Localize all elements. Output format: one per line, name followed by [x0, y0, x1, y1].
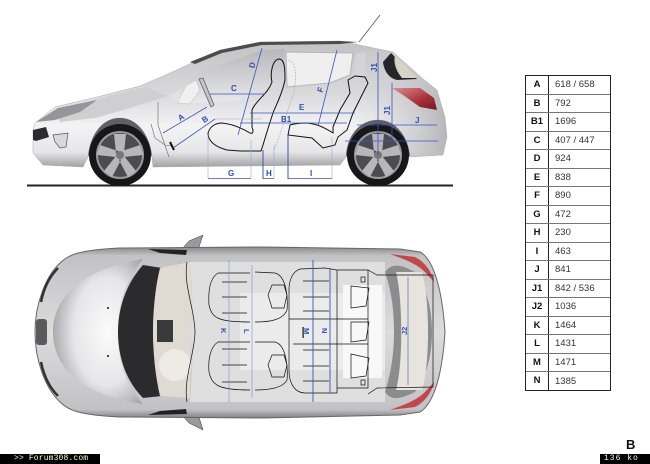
- nose dark trim: [41, 268, 58, 396]
- dimensions table: F: [534, 190, 540, 201]
- dimensions table: 841: [555, 264, 571, 275]
- dimensions table: 890: [555, 190, 571, 201]
- top dimension lines: [229, 260, 408, 402]
- front spokes: [97, 134, 143, 177]
- fog lamp: [53, 133, 68, 148]
- dashboard: [153, 262, 192, 398]
- dimensions table: 1036: [555, 301, 576, 312]
- M mark: [302, 327, 304, 338]
- top dimension labels: J2: [400, 327, 409, 335]
- a-pillar handle: [199, 78, 214, 107]
- top dimension labels: L: [242, 329, 251, 334]
- top view car: [35, 235, 445, 430]
- cabin floor: [190, 262, 385, 402]
- dimensions table: [525, 75, 611, 391]
- badge: [36, 319, 47, 345]
- footer bar left: >> Forum308.com: [14, 454, 88, 463]
- dimension labels: B1: [281, 115, 292, 124]
- front wheel: [89, 124, 151, 186]
- dimensions table: K: [534, 320, 540, 331]
- top mirror: [181, 235, 203, 252]
- mirror base bottom: [148, 409, 187, 415]
- dimensions table: 1696: [555, 116, 576, 127]
- dimensions table: 1431: [555, 338, 576, 349]
- top body: [35, 247, 445, 418]
- dimension labels: H: [266, 169, 272, 178]
- dimension labels: [176, 61, 419, 178]
- dimension labels: J: [415, 116, 419, 125]
- hood shading: [55, 87, 168, 122]
- dimension labels: A: [176, 112, 186, 123]
- quarter window: [352, 52, 366, 80]
- dimensions table: 1385: [555, 376, 576, 387]
- top dimension labels: K: [219, 328, 228, 334]
- bottom tail light: [390, 382, 434, 410]
- page letter: B: [626, 437, 635, 452]
- rear window: [286, 52, 353, 87]
- dimensions table: 1471: [555, 357, 576, 368]
- ground line: [27, 184, 453, 186]
- dimensions table: J: [534, 264, 540, 275]
- front window: [170, 49, 285, 104]
- dimensions table: D: [534, 153, 540, 164]
- roof strip: [190, 41, 358, 64]
- dimensions table: L: [534, 338, 540, 349]
- rear window: [385, 266, 432, 398]
- dimension labels: G: [228, 169, 234, 178]
- dimensions table: E: [534, 172, 540, 183]
- hood: [53, 259, 143, 404]
- front arch shadow: [88, 118, 152, 157]
- tail light: [392, 88, 437, 110]
- dimension labels: D: [247, 61, 258, 69]
- footer bar left: [0, 454, 100, 464]
- dimension labels: E: [299, 103, 305, 112]
- boot: [343, 285, 382, 378]
- windscreen: [118, 265, 162, 398]
- rear wheel: [347, 124, 409, 186]
- airbag dome: [159, 349, 191, 381]
- dimensions table: I: [536, 246, 538, 257]
- dimensions table: 792: [555, 98, 571, 109]
- dimensions table: 463: [555, 246, 571, 257]
- dimension labels: J1: [383, 106, 392, 115]
- door lines: [151, 102, 172, 157]
- dimensions table: H: [534, 227, 540, 238]
- dimension lines: [163, 48, 438, 179]
- dimensions table: B1: [531, 116, 543, 127]
- dimension labels: J1: [370, 63, 379, 72]
- side body: [33, 41, 447, 167]
- pedal: [170, 142, 174, 150]
- rear windscreen: [383, 53, 417, 80]
- footer bar right: [600, 454, 650, 464]
- rear quarter shading: [350, 50, 447, 157]
- dimensions table: 230: [555, 227, 571, 238]
- screen: [157, 320, 173, 342]
- dimensions table: M: [533, 357, 541, 368]
- mirror base top: [148, 249, 187, 255]
- seats outlines: [186, 262, 433, 402]
- dimensions table: 842 / 536: [555, 283, 595, 294]
- footer bar right: 136 ko: [604, 454, 639, 463]
- dimensions table: A: [534, 79, 540, 90]
- side view car: [33, 15, 447, 186]
- front seat outline: [208, 59, 285, 151]
- dashboard: [177, 80, 200, 104]
- rear seat outline: [288, 76, 368, 148]
- rear arch shadow: [346, 120, 410, 157]
- dimensions table: 618 / 658: [555, 79, 595, 90]
- bottom mirror: [181, 412, 203, 430]
- dimensions table: C: [534, 135, 540, 146]
- rear spokes: [355, 134, 401, 177]
- headlight: [36, 100, 97, 122]
- dimension labels: B: [200, 114, 210, 125]
- front grille: [33, 127, 49, 141]
- dimensions table: J2: [532, 301, 542, 312]
- antenna: [359, 15, 380, 42]
- ghost seat: [274, 60, 296, 150]
- dimension labels: F: [316, 86, 326, 93]
- dimension labels: I: [310, 169, 312, 178]
- dimensions table: 472: [555, 209, 571, 220]
- dimensions table: B: [534, 98, 540, 109]
- dimensions table: 924: [555, 153, 571, 164]
- dimension labels: C: [231, 84, 237, 93]
- dimensions table: 1464: [555, 320, 576, 331]
- top dimension labels: [219, 327, 409, 335]
- dimensions table: N: [534, 375, 540, 386]
- hood dots: [107, 307, 109, 309]
- dimensions table: 838: [555, 172, 571, 183]
- dimensions table: 407 / 447: [555, 135, 595, 146]
- dimensions table: G: [533, 209, 541, 220]
- top dimension labels: N: [320, 328, 329, 333]
- top dimension labels: M: [302, 328, 311, 334]
- dimensions table: J1: [532, 283, 542, 294]
- top tail light: [390, 254, 434, 282]
